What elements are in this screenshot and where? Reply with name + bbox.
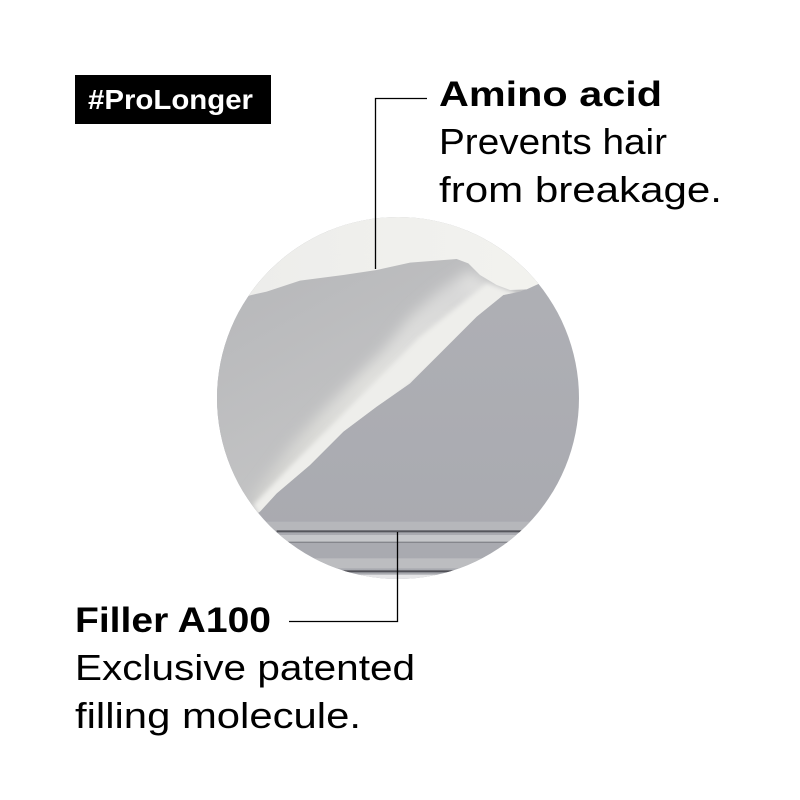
connector: filler xyxy=(289,532,398,622)
callout: filler A100: Filler A100 xyxy=(75,601,271,640)
callout: filler A100: Exclusive patented xyxy=(75,647,415,688)
callout: amino acid: from breakage. xyxy=(439,169,722,210)
tag: #ProLonger: #ProLonger xyxy=(88,84,253,115)
callout: amino acid: Prevents hair xyxy=(439,121,667,162)
bottom ridges xyxy=(267,522,533,530)
tag: #ProLonger xyxy=(75,75,271,124)
callout: amino acid xyxy=(439,75,722,210)
top cream band xyxy=(248,217,538,296)
upper left grey panel and cream stripe xyxy=(217,230,534,513)
image: cream swatch circle xyxy=(210,210,590,590)
callout: filler A100: filling molecule. xyxy=(75,695,361,736)
callout: filler A100 xyxy=(75,601,415,736)
connector: amino acid xyxy=(376,98,427,269)
callout: amino acid: Amino acid xyxy=(439,75,662,114)
